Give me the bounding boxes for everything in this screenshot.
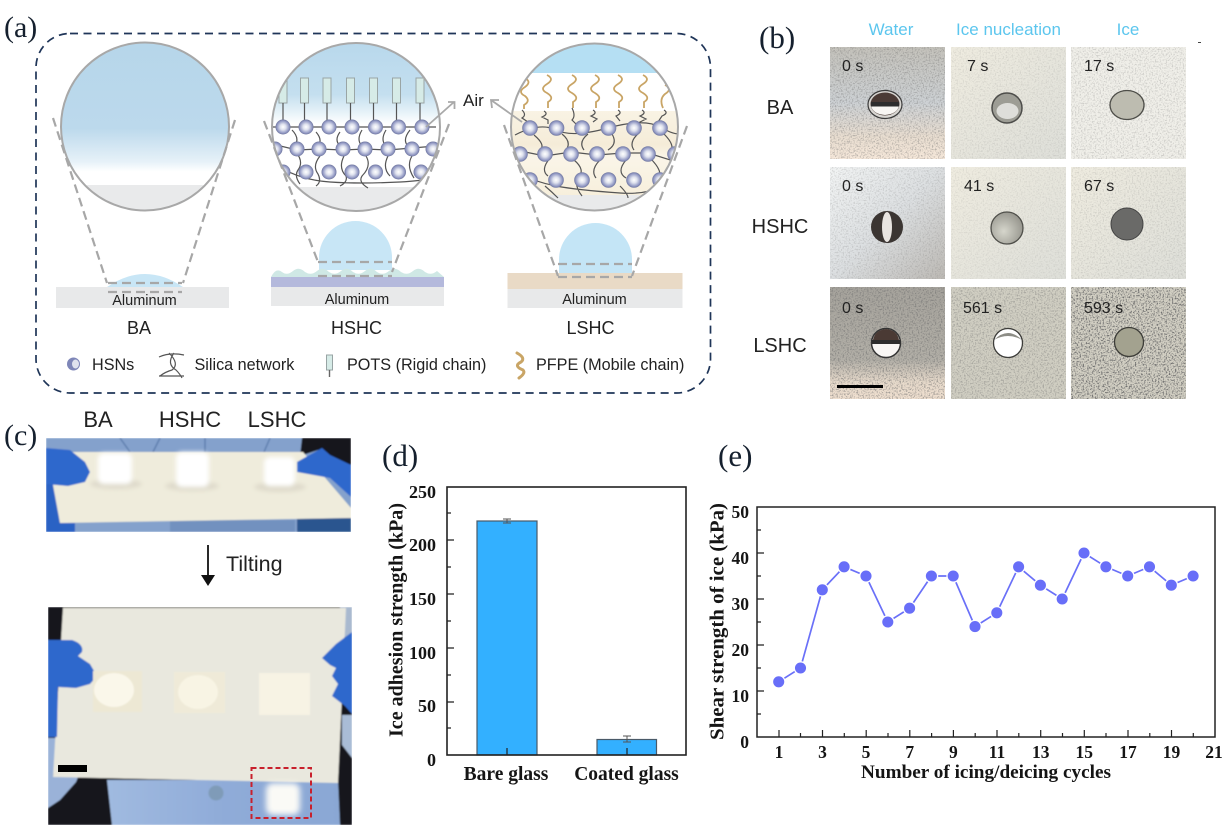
scale bar <box>837 385 883 388</box>
x tick labels: 1 <box>775 742 783 762</box>
sample labels: HSHC <box>159 407 221 432</box>
row labels: BA <box>767 97 794 119</box>
BA substrate <box>56 287 229 308</box>
micrograph: BA nucleation: 7 s <box>967 58 988 75</box>
label (c): (c) <box>4 419 37 452</box>
x axis title: Number of icing/deicing cycles <box>861 762 1111 783</box>
legend: HSNs: HSNs <box>92 356 134 374</box>
y tick labels: 100 <box>409 643 436 663</box>
label (e): (e) <box>718 438 752 473</box>
x tick labels: 9 <box>949 742 958 762</box>
micrograph: BA water <box>830 47 945 159</box>
y tick labels: 20 <box>732 640 749 660</box>
column headers: Ice <box>1117 20 1139 39</box>
air label and arrows: Air <box>463 91 484 110</box>
legend: silica network <box>159 353 295 378</box>
BA zoom circle <box>60 42 230 211</box>
micrograph: HSHC ice <box>1071 167 1186 279</box>
HSHC zoom guides <box>264 121 449 276</box>
y tick labels: 0 <box>740 732 749 752</box>
LSHC droplet <box>559 223 632 273</box>
photo: before tilting <box>46 438 351 532</box>
x tick labels: Coated glass <box>574 764 679 785</box>
red highlight box <box>252 768 311 818</box>
column headers: Water <box>869 20 914 39</box>
panel e: shear strength line chart <box>706 502 1223 783</box>
BA name: BA <box>127 318 151 338</box>
LSHC zoom circle <box>510 42 683 213</box>
label (b): (b) <box>759 20 795 55</box>
air label and arrows <box>426 91 522 127</box>
legend: PFPE: PFPE (Mobile chain) <box>536 356 684 374</box>
scale bar <box>58 765 87 772</box>
HSHC aluminum label: Aluminum <box>325 292 389 308</box>
silica network <box>272 103 436 188</box>
dashed panel frame <box>36 34 710 393</box>
axes frame and ticks <box>757 507 1215 737</box>
y tick labels: 50 <box>732 502 749 522</box>
HSHC name: HSHC <box>331 318 382 338</box>
x tick labels: 7 <box>905 742 914 762</box>
HSHC rough layer <box>271 269 444 277</box>
x tick labels: 15 <box>1076 742 1093 762</box>
legend: PFPE <box>517 353 684 378</box>
sample labels <box>83 407 306 432</box>
LSHC nanoparticles <box>512 120 683 188</box>
micrograph: LSHC ice: 593 s <box>1084 300 1123 317</box>
BA aluminum label: Aluminum <box>112 293 177 309</box>
micrograph: HSHC ice: 67 s <box>1084 178 1114 195</box>
micrograph: HSHC water: 0 s <box>842 178 863 195</box>
micrograph: LSHC water: 0 s <box>842 300 863 317</box>
micrograph: HSHC nucleation <box>951 167 1066 279</box>
HSHC zoom circle <box>268 42 442 213</box>
y tick labels: 250 <box>409 482 436 502</box>
y tick labels: 150 <box>409 589 436 609</box>
legend: HSNs <box>67 356 134 374</box>
panel b: freezing micrographs <box>752 20 1201 399</box>
micrograph: LSHC ice <box>1071 287 1186 399</box>
row labels: HSHC <box>752 216 808 238</box>
micrograph: LSHC nucleation: 561 s <box>963 300 1002 317</box>
BA droplet <box>107 274 183 287</box>
label (d): (d) <box>382 438 418 473</box>
micrograph: BA nucleation <box>951 47 1066 159</box>
x tick labels: 21 <box>1205 742 1223 762</box>
data markers <box>772 547 1199 688</box>
x tick labels: Bare glass <box>464 764 549 785</box>
silica network <box>515 108 680 198</box>
y tick labels: 40 <box>732 548 749 568</box>
micrograph: LSHC water <box>830 287 945 399</box>
panel d: adhesion bar chart <box>386 482 686 785</box>
bars <box>477 521 656 755</box>
BA schematic <box>53 42 235 338</box>
LSHC name: LSHC <box>566 318 615 338</box>
y tick labels <box>732 502 749 752</box>
legend: POTS: POTS (Rigid chain) <box>347 356 486 374</box>
micrograph: BA ice <box>1071 47 1186 159</box>
y tick labels: 200 <box>409 535 436 555</box>
HSHC substrate <box>271 287 444 306</box>
sample labels: BA <box>83 407 113 432</box>
BA zoom guides <box>53 118 235 292</box>
legend <box>67 353 684 378</box>
x tick labels: 3 <box>818 742 827 762</box>
legend: silica network: Silica network <box>194 356 295 374</box>
error bars <box>503 519 631 742</box>
LSHC schematic <box>504 42 687 338</box>
data line <box>779 553 1193 682</box>
y tick labels: 0 <box>427 750 436 770</box>
row labels: LSHC <box>753 335 807 357</box>
x tick labels: 17 <box>1119 742 1137 762</box>
LSHC substrate <box>508 289 682 308</box>
y tick labels: 10 <box>732 686 749 706</box>
panel c: tilting demo <box>46 407 352 825</box>
x tick labels: 11 <box>989 742 1005 762</box>
y axis title: Ice adhesion strength (kPa) <box>386 503 408 737</box>
micrograph: HSHC nucleation: 41 s <box>964 178 994 195</box>
y tick labels: 50 <box>418 696 436 716</box>
y tick labels <box>409 482 436 770</box>
tilting arrow <box>201 545 215 586</box>
axes frame and ticks <box>447 487 686 755</box>
micrograph: LSHC nucleation <box>951 287 1066 399</box>
PFPE mobile chains <box>521 75 669 109</box>
LSHC aluminum label: Aluminum <box>562 292 627 308</box>
HSHC schematic <box>264 42 449 338</box>
photo: after tilting <box>48 607 352 825</box>
HSHC droplet <box>319 221 392 270</box>
POTS rigid chains <box>279 78 424 103</box>
column headers: Ice nucleation <box>956 20 1061 39</box>
x tick labels: 19 <box>1163 742 1180 762</box>
micrograph: BA ice: 17 s <box>1084 58 1114 75</box>
x tick labels: 13 <box>1032 742 1050 762</box>
x tick labels: 5 <box>862 742 871 762</box>
label (a): (a) <box>4 11 37 44</box>
micrograph: HSHC water <box>830 167 945 279</box>
row labels <box>752 97 808 357</box>
x tick labels <box>464 764 679 785</box>
LSHC zoom guides <box>504 125 687 277</box>
panel a: coating schematics <box>36 34 710 393</box>
tilting label: Tilting <box>226 552 283 576</box>
y tick labels: 30 <box>732 594 749 614</box>
micrograph: BA water: 0 s <box>842 58 863 75</box>
sample labels: LSHC <box>248 407 306 432</box>
column headers <box>869 20 1139 39</box>
x tick labels <box>775 742 1223 762</box>
HSHC nanoparticles <box>268 120 440 180</box>
y axis title: Shear strength of ice (kPa) <box>706 503 728 740</box>
